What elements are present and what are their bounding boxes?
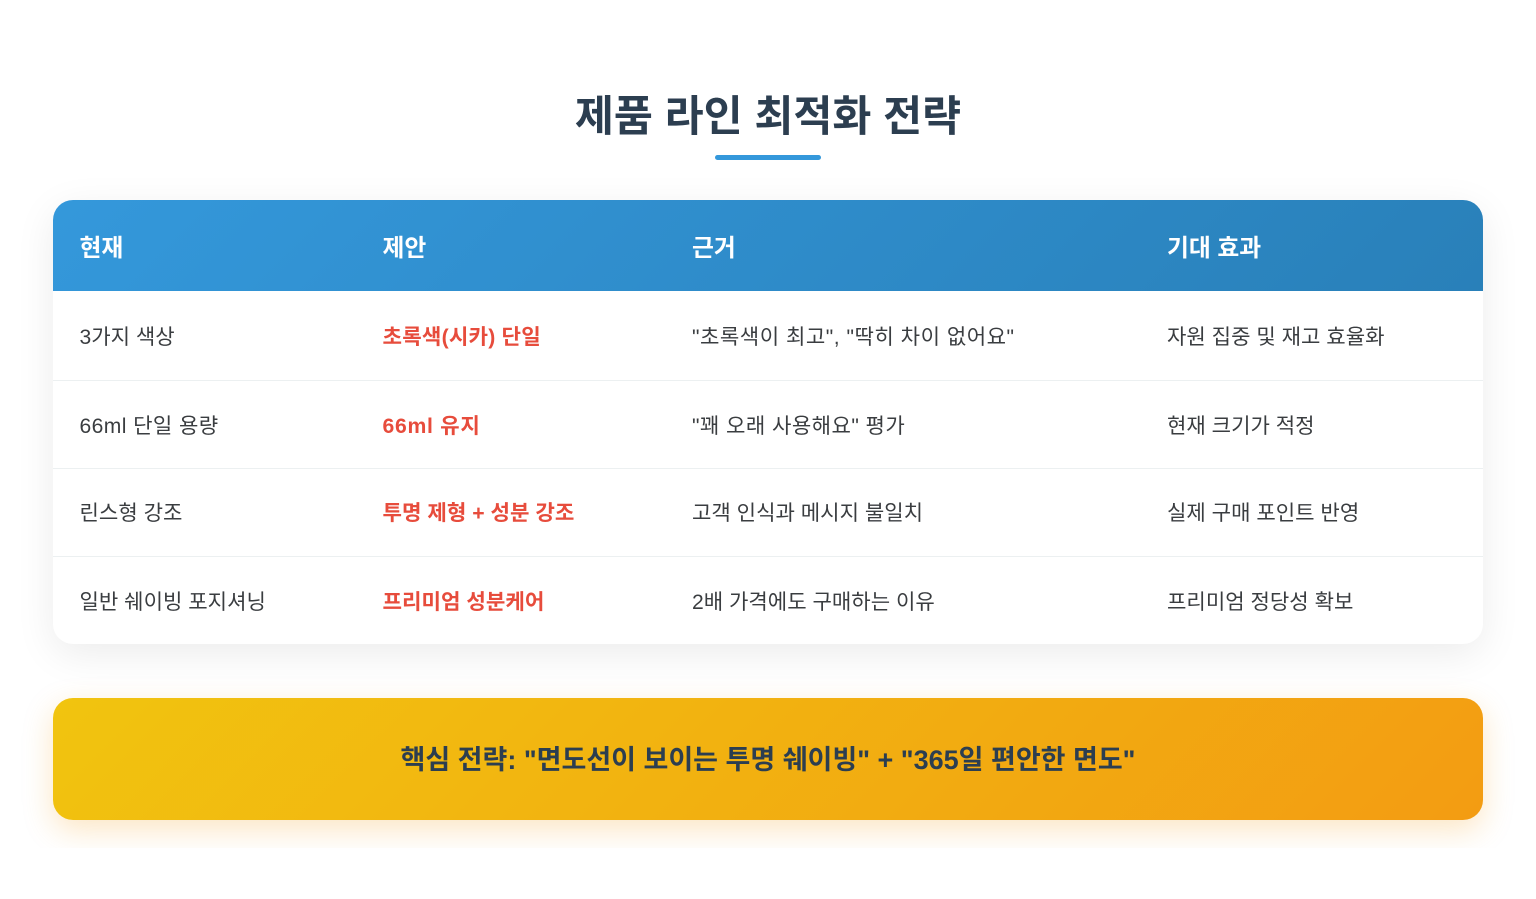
rationale: 2배 가격에도 구매하는 이유 bbox=[692, 591, 935, 614]
table row 4: positioning bbox=[80, 591, 1353, 614]
header: rationale: 근거 bbox=[692, 235, 736, 262]
rationale: 고객 인식과 메시지 불일치 bbox=[692, 502, 923, 525]
title underline bbox=[715, 155, 821, 160]
current: 린스형 강조 bbox=[80, 502, 182, 525]
callout: core strategy bbox=[53, 698, 1483, 820]
header: expected effect: 기대 효과 bbox=[1167, 235, 1261, 262]
proposal: 프리미엄 성분케어 bbox=[382, 591, 544, 614]
current: 3가지 색상 bbox=[80, 326, 175, 349]
expected effect: 현재 크기가 적정 bbox=[1167, 415, 1315, 438]
callout: core strategy: 핵심 전략: "면도선이 보이는 투명 쉐이빙" + "365일 편안한 면도" bbox=[400, 745, 1136, 775]
expected effect: 자원 집중 및 재고 효율화 bbox=[1167, 326, 1385, 349]
table row 1: colors bbox=[53, 291, 1483, 381]
proposal: 초록색(시카) 단일 bbox=[382, 326, 541, 349]
expected effect: 실제 구매 포인트 반영 bbox=[1167, 502, 1359, 525]
header: proposal: 제안 bbox=[382, 235, 426, 262]
current: 일반 쉐이빙 포지셔닝 bbox=[80, 591, 266, 614]
rationale: "꽤 오래 사용해요" 평가 bbox=[692, 415, 905, 438]
proposal: 투명 제형 + 성분 강조 bbox=[382, 502, 574, 525]
table row 2: volume bbox=[53, 381, 1483, 469]
panel: strategy table bbox=[53, 200, 1483, 644]
table row 3: formulation bbox=[53, 469, 1483, 557]
title: 제품 라인 최적화 전략 bbox=[575, 93, 961, 140]
expected effect: 프리미엄 정당성 확보 bbox=[1167, 591, 1353, 614]
rationale: "초록색이 최고", "딱히 차이 없어요" bbox=[692, 326, 1015, 349]
proposal: 66ml 유지 bbox=[382, 415, 481, 438]
header: current: 현재 bbox=[80, 235, 123, 262]
table header bbox=[53, 200, 1483, 291]
current: 66ml 단일 용량 bbox=[80, 415, 219, 438]
